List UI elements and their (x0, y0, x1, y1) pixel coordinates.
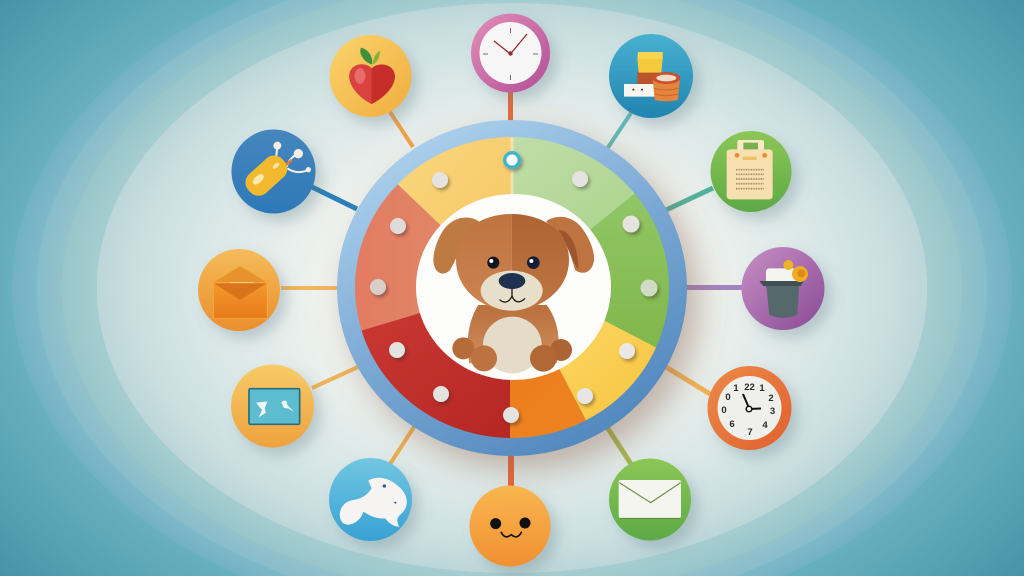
connector: bag (666, 188, 713, 210)
wheel markers (370, 171, 658, 423)
icon: wall clock (471, 14, 550, 92)
icon: orange numbered clock: 0 (725, 392, 731, 403)
icon: smiling face (470, 486, 550, 566)
connector: envelope (281, 286, 338, 290)
icon: jars and boxes (609, 34, 693, 118)
icon: orange numbered clock: 1 (733, 383, 739, 394)
wheel segments (355, 137, 669, 438)
connector: wall clock (508, 90, 513, 122)
puppy nose (499, 273, 525, 289)
segment: yellow (560, 320, 656, 420)
connector: jars (607, 113, 631, 149)
connector lines (281, 90, 742, 488)
segment: salmon (355, 184, 440, 330)
icon: orange numbered clock: 3 (770, 406, 775, 417)
icon: shopping bag with text (710, 131, 792, 212)
icon: lidded bin with bells (742, 247, 824, 330)
connector: bin (686, 285, 742, 290)
puppy mascot (433, 214, 594, 373)
icon: orange numbered clock: 22 (744, 382, 755, 393)
connector: mail (607, 427, 631, 464)
connector: smile (508, 455, 514, 488)
icon: orange numbered clock (708, 366, 792, 450)
icon: green mail (609, 458, 691, 540)
top teal marker (503, 151, 521, 169)
icon: capsule tool (232, 130, 316, 214)
connector: apple (390, 112, 413, 147)
icon: orange numbered clock: 6 (729, 419, 735, 430)
outer blue ring (337, 120, 687, 456)
puppy paws (452, 337, 474, 359)
segment: green (590, 194, 669, 348)
puppy body (468, 305, 559, 363)
icon: open envelope (198, 249, 280, 331)
puppy head (456, 214, 512, 311)
icon: apple heart (330, 35, 412, 117)
connector: orange clock (666, 367, 710, 394)
icon: white animal (329, 458, 412, 541)
connector: animal (390, 427, 414, 464)
icon: orange numbered clock: 1 (759, 383, 765, 394)
puppy ears (433, 217, 481, 274)
connector: tool (312, 187, 357, 209)
icon: tablet (231, 364, 314, 448)
centre white disc (416, 194, 611, 380)
central wheel (330, 100, 690, 456)
segment: light yellow (398, 137, 512, 226)
segment: orange (510, 369, 586, 438)
connector: tablet (312, 367, 358, 388)
icon: orange numbered clock: 4 (762, 420, 768, 431)
puppy mouth (500, 289, 525, 302)
icon: orange numbered clock: 0 (721, 405, 727, 416)
icon: orange numbered clock: 7 (747, 427, 753, 438)
segment: dark red (362, 313, 510, 438)
puppy eyes (487, 257, 499, 269)
segment: light green (512, 137, 634, 230)
icon: orange numbered clock: 2 (768, 393, 774, 404)
puppy muzzle (481, 271, 543, 311)
